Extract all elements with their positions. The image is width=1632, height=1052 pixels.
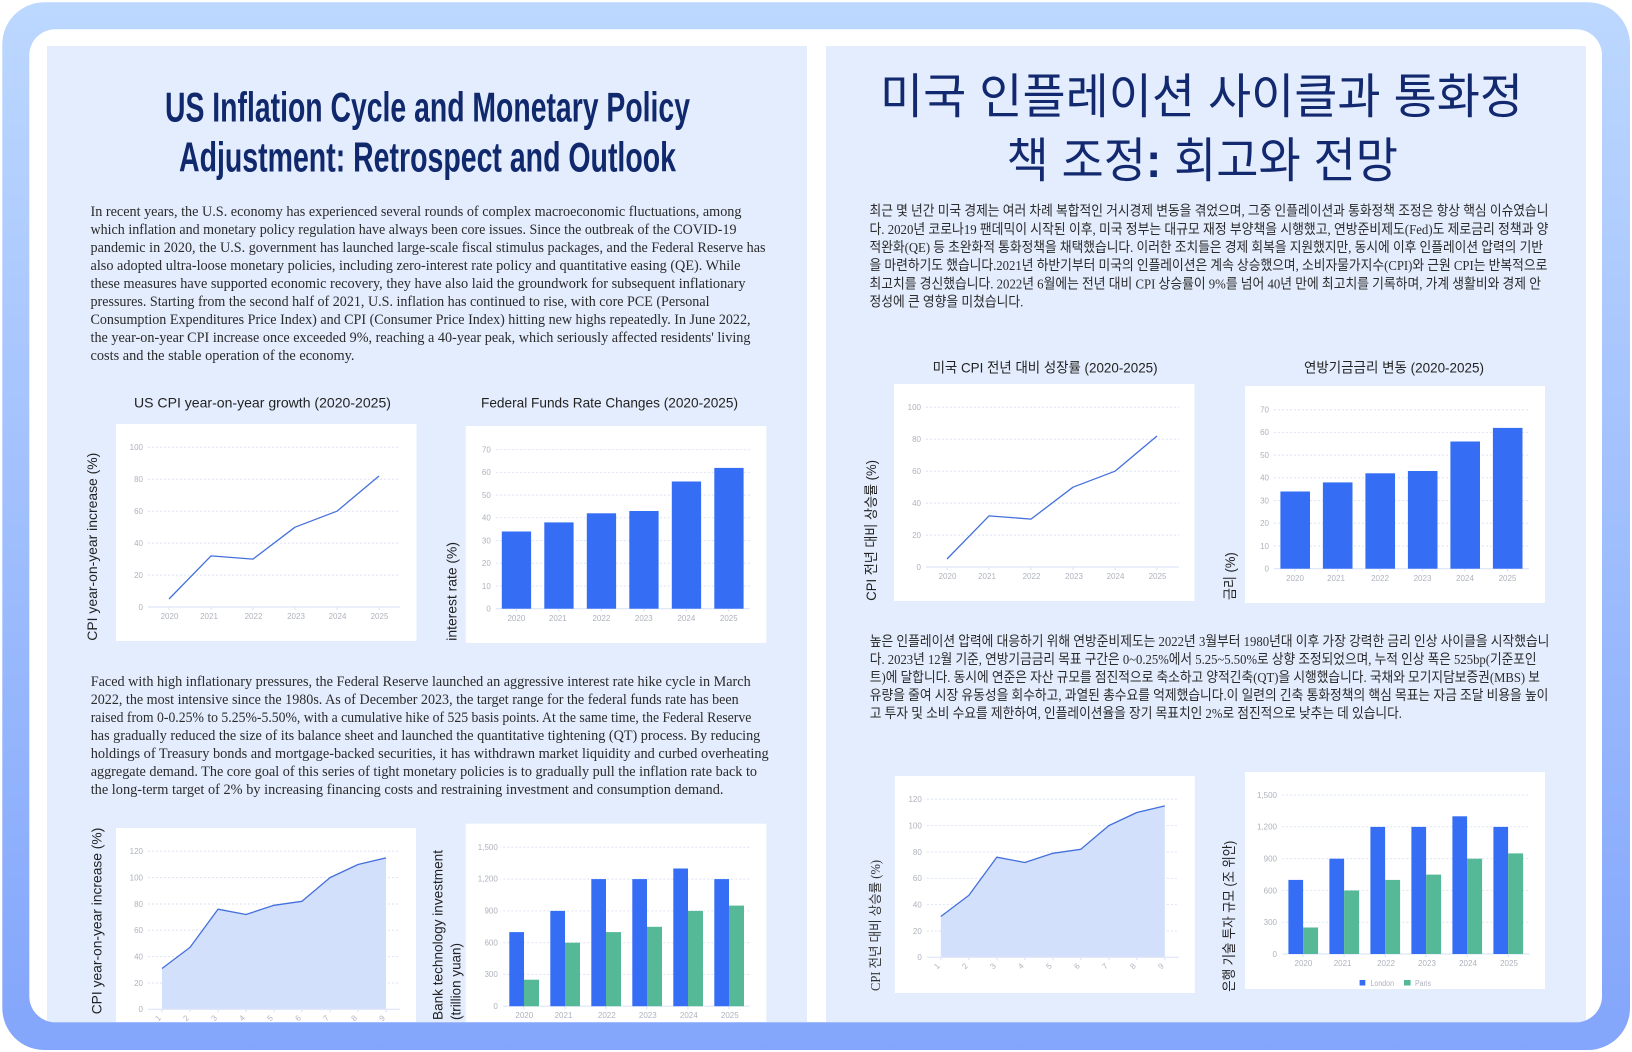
text block: English intro: the year-on-year CPI increase once exceeded 9%, reaching a 40-year peak, which seriously affected residents' living: [90, 330, 750, 346]
bar chart: Federal Funds Rate: [466, 426, 766, 643]
area chart: CPI increase: 40: [134, 952, 144, 962]
grouped bar chart: Korean bank technology: 900: [1264, 854, 1278, 864]
bar chart: Federal Funds Rate: 2025: [720, 614, 738, 623]
text block: English policy: [91, 674, 769, 798]
grouped bar chart: Bank technology investment: 2022: [598, 1011, 616, 1020]
line chart: Korean CPI growth: 40: [912, 499, 922, 508]
grouped bar chart: Bank technology investment: 2020: [515, 1011, 534, 1020]
line chart: US CPI growth: 2024: [329, 612, 347, 621]
title: Korean: [880, 71, 1523, 188]
grouped bar chart: Korean bank technology: 1,200: [1257, 822, 1278, 832]
grouped bar chart: Bank technology investment: 2024: [680, 1011, 698, 1020]
area chart: CPI increase: 100: [130, 874, 144, 882]
area chart: CPI increase: 1: [153, 1013, 163, 1023]
grouped bar chart: Bank technology investment: 1,200: [478, 875, 498, 884]
line chart: Korean CPI growth: 100: [908, 403, 922, 412]
axis label: Korean rate: 금리 (%): [1222, 552, 1238, 600]
text block: Korean intro: 최근 몇 년간 미국 경제는 여러 차례 복합적인 거시경제 변동을 겪었으며, 그중 인플레이션과 통화정책 조정은 항상 핵심 이슈였습니: [870, 204, 1548, 220]
area chart: Korean CPI: 9: [1156, 961, 1166, 971]
text block: English policy: has gradually reduced the size of its balance sheet and launched the quantitative tightening (QT) process. By reducing: [91, 728, 760, 744]
grouped bar chart: Bank technology investment: 300: [484, 970, 498, 979]
bar chart: Korean federal funds rate: 40: [1260, 474, 1270, 482]
line chart: US CPI growth: 20: [134, 571, 144, 580]
area chart: Korean CPI: 80: [913, 848, 922, 857]
text block: Korean policy: 다. 2023년 12월 기준, 연방기금금리 목표 구간은 0~0.25%에서 5.25~5.50%로 상향 조정되었으며, 누적 인상 폭은 525bp(기준포인: [870, 652, 1537, 668]
panel: Korean column: [826, 46, 1586, 1022]
title: English: [165, 84, 690, 180]
bar chart: Federal Funds Rate: 2023: [635, 614, 653, 623]
text block: English policy: Faced with high inflationary pressures, the Federal Reserve launched an aggressive interest rate hike cycle in March: [91, 674, 751, 690]
bar chart: Korean federal funds rate: 70: [1260, 406, 1270, 414]
legend: [1360, 979, 1431, 988]
title: English: Adjustment: Retrospect and Outlook: [179, 134, 676, 180]
area chart: CPI increase: 20: [134, 979, 144, 988]
axis label: Bank technology investment: [430, 850, 464, 1020]
text block: Korean intro: [870, 204, 1549, 310]
line chart: Korean CPI growth: 2025: [1149, 572, 1167, 581]
line chart: Korean CPI growth: 60: [912, 467, 922, 476]
line chart: US CPI growth: 40: [134, 539, 144, 548]
bar chart: Korean federal funds rate: 2020: [1286, 574, 1304, 583]
area chart: CPI increase: 60: [134, 926, 144, 935]
area chart: Korean CPI: 6: [1072, 961, 1082, 971]
area chart: Korean CPI: 8: [1128, 961, 1138, 971]
area chart: Korean CPI: 4: [1016, 961, 1026, 971]
line chart: Korean CPI growth: 0: [917, 563, 922, 572]
bar chart: Federal Funds Rate: 2024: [678, 614, 696, 623]
text block: English policy: 2022, the most intensive since the 1980s. As of December 2023, the target range for the federal funds rate has been: [91, 692, 739, 708]
bar chart: Federal Funds Rate: 20: [482, 559, 491, 568]
grouped bar chart: Korean bank technology: 2021: [1334, 959, 1352, 968]
area chart: Korean CPI: [895, 776, 1195, 993]
area chart: CPI increase: 9: [377, 1013, 387, 1023]
axis label: Korean bank technology: 은행 기술 투자 규모 (조 위안): [1221, 841, 1237, 992]
bar chart: Korean federal funds rate: 2023: [1414, 574, 1432, 583]
text block: Korean policy: 고 투자 및 소비 수요를 제한하여, 인플레이션율을 장기 목표치인 2%로 점진적으로 낮추는 데 있습니다.: [870, 706, 1402, 722]
text block: English policy: aggregate demand. The core goal of this series of tight monetary policies is to gradually pull the inflation rate back to: [91, 764, 757, 780]
text block: English intro: pressures. Starting from the second half of 2021, U.S. inflation has continued to rise, with core PCE (Personal: [90, 294, 710, 310]
text block: English policy: holdings of Treasury bonds and mortgage-backed securities, it has withdrawn market liquidity and curbed overheating: [91, 746, 769, 762]
bar chart: Federal Funds Rate: 60: [482, 468, 491, 477]
bar chart: Federal Funds Rate: 2021: [549, 614, 567, 623]
bar chart: Korean federal funds rate: 20: [1260, 519, 1270, 528]
title: Korean: 책 조정: 회고와 전망: [1006, 135, 1398, 188]
text block: Korean policy: 높은 인플레이션 압력에 대응하기 위해 연방준비제도는 2022년 3월부터 1980년대 이후 가장 강력한 금리 인상 사이클을 시작했습니: [870, 634, 1549, 650]
text block: English policy: raised from 0-0.25% to 5.25%-5.50%, with a cumulative hike of 525 basis points. At the same time, the Federal Reserve: [91, 710, 751, 726]
chart title: Federal Funds Rate: Federal Funds Rate Changes (2020-2025): [481, 394, 738, 410]
grouped bar chart: Bank technology investment: 0: [493, 1002, 498, 1011]
line chart: Korean CPI growth: 2024: [1107, 572, 1125, 581]
axis label: Korean CPI rate: CPI 전년 대비 상승률 (%): [863, 460, 879, 601]
grouped bar chart: Bank technology investment: 2025: [721, 1011, 739, 1020]
axis label: CPI increase: CPI year-on-year increase (%): [84, 453, 100, 641]
grouped bar chart: Korean bank technology: 1,500: [1257, 791, 1278, 800]
area chart: Korean CPI: 5: [1044, 961, 1054, 971]
text block: English intro: costs and the stable operation of the economy.: [90, 348, 354, 364]
line chart: US CPI growth: 0: [139, 603, 144, 612]
text block: English intro: In recent years, the U.S. economy has experienced several rounds of complex macroeconomic fluctuations, among: [90, 204, 742, 220]
legend: London: [1370, 979, 1394, 988]
grouped bar chart: Korean bank technology: 2022: [1377, 959, 1395, 968]
area chart: CPI increase: 0: [139, 1005, 144, 1014]
text block: English intro: Consumption Expenditures Price Index) and CPI (Consumer Price Index) hitting new highs repeatedly. In June 2022,: [90, 312, 750, 328]
bar chart: Korean federal funds rate: 60: [1260, 428, 1270, 437]
bar chart: Federal Funds Rate: 30: [482, 536, 491, 546]
bar chart: Federal Funds Rate: 10: [482, 582, 491, 591]
bar chart: Korean federal funds rate: 2022: [1371, 574, 1389, 583]
title: English: US Inflation Cycle and Monetary Policy: [165, 84, 690, 130]
area chart: Korean CPI: 2: [960, 961, 970, 971]
grouped bar chart: Korean bank technology: 0: [1273, 950, 1278, 959]
line chart: US CPI growth: 2020: [161, 612, 179, 621]
grouped bar chart: Korean bank technology: 2024: [1459, 959, 1477, 968]
text block: Korean intro: 을 마련하기도 했습니다.2021년 하반기부터 미국의 인플레이션은 계속 상승했으며, 소비자물가지수(CPI)와 근원 CPI는 반복적으로: [870, 258, 1547, 274]
area chart: Korean CPI: 3: [988, 961, 998, 971]
area chart: Korean CPI: 120: [908, 795, 922, 804]
title: Korean: 미국 인플레이션 사이클과 통화정: [880, 71, 1523, 124]
bar chart: Korean federal funds rate: 2021: [1327, 574, 1345, 583]
line chart: US CPI growth: 60: [134, 507, 144, 516]
panel: English column: [47, 46, 807, 1045]
text block: Korean policy: 유량을 줄여 시장 유동성을 회수하고, 과열된 총수요를 억제했습니다.이 일련의 긴축 통화정책의 핵심 목표는 자금 조달 비용을 높이: [870, 688, 1548, 704]
line chart: Korean CPI growth: 20: [912, 531, 922, 540]
legend: Paris: [1415, 979, 1431, 988]
area chart: Korean CPI: 40: [913, 900, 922, 910]
text block: Korean intro: 최고치를 경신했습니다. 2022년 6월에는 전년 대비 CPI 상승률이 9%를 넘어 40년 만에 최고치를 기록하며, 가계 생활비와 경제 안: [870, 276, 1541, 292]
line chart: US CPI growth: 2025: [371, 612, 389, 621]
bar chart: Korean federal funds rate: 0: [1265, 564, 1270, 574]
chart title: US CPI growth: US CPI year-on-year growth (2020-2025): [134, 394, 391, 410]
axis label: Bank technology investment: Bank technology investment: [430, 850, 446, 1020]
text block: English intro: pandemic in 2020, the U.S. government has launched large-scale fiscal stimulus packages, and the Federal Reserve has: [90, 240, 766, 256]
chart title: Korean federal funds rate: 연방기금금리 변동 (2020-2025): [1304, 360, 1484, 376]
area chart: CPI increase: 8: [349, 1013, 359, 1023]
area chart: CPI increase: 80: [134, 900, 144, 909]
grouped bar chart: Korean bank technology: 2020: [1295, 959, 1313, 968]
grouped bar chart: Bank technology investment: 600: [484, 939, 498, 948]
chart title: Korean CPI growth: 미국 CPI 전년 대비 성장률 (2020-2025): [933, 360, 1158, 376]
text block: English intro: also adopted ultra-loose monetary policies, including zero-interest rate policy and quantitative easing (QE). While: [90, 258, 740, 274]
area chart: CPI increase: 120: [130, 847, 144, 856]
line chart: US CPI growth: 80: [134, 475, 144, 484]
axis label: interest rate: interest rate (%): [444, 542, 460, 641]
text block: Korean intro: 다. 2020년 코로나19 팬데믹이 시작된 이후, 미국 정부는 대규모 재정 부양책을 시행했고, 연방준비제도(Fed)도 제로금리 정책과 양: [870, 222, 1549, 238]
line chart: Korean CPI growth: 2020: [939, 572, 957, 581]
bar chart: Korean federal funds rate: [1245, 386, 1545, 603]
text block: Korean policy: 트)에 달합니다. 동시에 연준은 자산 규모를 점진적으로 축소하고 양적긴축(QT)을 시행했습니다. 국채와 모기지담보증권(MBS) 보: [870, 670, 1540, 686]
bar chart: Federal Funds Rate: 2022: [593, 614, 611, 623]
bar chart: Korean federal funds rate: 2025: [1499, 574, 1517, 583]
grouped bar chart: Bank technology investment: 2023: [639, 1011, 657, 1020]
line chart: US CPI growth: 2022: [245, 612, 263, 621]
grouped bar chart: Korean bank technology: 2023: [1418, 959, 1436, 968]
line chart: US CPI growth: [116, 424, 416, 641]
bar chart: Federal Funds Rate: 2020: [508, 614, 526, 623]
area chart: CPI increase: 4: [237, 1013, 247, 1023]
axis label: Bank technology investment: (trillion yuan): [448, 943, 464, 1020]
area chart: Korean CPI: 60: [913, 874, 922, 883]
line chart: Korean CPI growth: 80: [912, 435, 922, 444]
bar chart: Federal Funds Rate: 70: [482, 446, 491, 454]
bar chart: Korean federal funds rate: 50: [1260, 451, 1270, 460]
area chart: Korean CPI: 0: [917, 953, 922, 962]
text block: English policy: the long-term target of 2% by increasing financing costs and restraining investment and consumption demand.: [91, 782, 723, 798]
text block: Korean intro: 정성에 큰 영향을 미쳤습니다.: [870, 294, 1023, 310]
grouped bar chart: Bank technology investment: 2021: [555, 1011, 573, 1020]
grouped bar chart: Bank technology investment: 900: [484, 907, 498, 916]
area chart: CPI increase: 5: [265, 1013, 275, 1023]
line chart: US CPI growth: 2023: [287, 612, 305, 621]
axis label: CPI increase, area chart: CPI year-on-year increase (%): [88, 828, 104, 1014]
area chart: CPI increase: 7: [321, 1013, 331, 1023]
area chart: CPI increase: [116, 828, 416, 1045]
bar chart: Federal Funds Rate: 0: [486, 604, 491, 614]
area chart: CPI increase: 3: [209, 1013, 219, 1023]
grouped bar chart: Bank technology investment: [466, 824, 766, 1041]
grouped bar chart: Korean bank technology: 2025: [1500, 959, 1518, 968]
area chart: Korean CPI: 1: [932, 961, 942, 971]
line chart: Korean CPI growth: 2023: [1065, 572, 1083, 581]
text block: Korean intro: 적완화(QE) 등 초완화적 통화정책을 채택했습니다. 이러한 조치들은 경제 회복을 지원했지만, 동시에 이후 인플레이션 압력의 기반: [870, 240, 1543, 256]
line chart: Korean CPI growth: 2022: [1023, 572, 1041, 581]
bar chart: Korean federal funds rate: 2024: [1456, 574, 1474, 583]
line chart: US CPI growth: 2021: [200, 612, 218, 621]
grouped bar chart: Korean bank technology: 600: [1264, 886, 1278, 896]
bar chart: Federal Funds Rate: 40: [482, 514, 491, 522]
grouped bar chart: Korean bank technology: [1245, 772, 1545, 989]
line chart: Korean CPI growth: [894, 384, 1194, 601]
bar chart: Korean federal funds rate: 10: [1260, 542, 1270, 551]
area chart: Korean CPI: 20: [913, 927, 922, 936]
line chart: Korean CPI growth: 2021: [978, 572, 996, 581]
text block: English intro: these measures have supported economic recovery, they have also laid the groundwork for subsequent inflationary: [90, 276, 746, 292]
bar chart: Federal Funds Rate: 50: [482, 491, 491, 500]
area chart: CPI increase: 6: [293, 1013, 303, 1023]
area chart: Korean CPI: 7: [1100, 961, 1110, 971]
text block: English intro: which inflation and monetary policy regulation have always been core issues. Since the outbreak of the COVID-19: [90, 222, 736, 238]
bar chart: Korean federal funds rate: 30: [1260, 496, 1270, 506]
text block: Korean policy: [870, 634, 1549, 722]
text block: English intro: [90, 204, 766, 364]
grouped bar chart: Korean bank technology: 300: [1264, 918, 1278, 927]
axis label: Korean CPI area: CPI 전년 대비 상승률 (%): [868, 860, 883, 991]
area chart: CPI increase: 2: [181, 1013, 191, 1023]
area chart: Korean CPI: 100: [908, 822, 922, 830]
grouped bar chart: Bank technology investment: 1,500: [478, 843, 498, 852]
line chart: US CPI growth: 100: [130, 443, 144, 452]
